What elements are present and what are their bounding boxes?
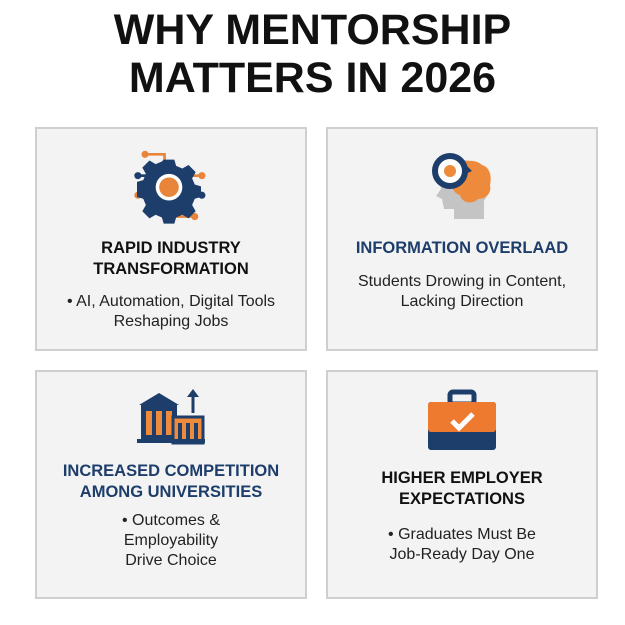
text [122,512,220,569]
text: Students Drowing in Content, [358,273,566,290]
heading [381,469,543,508]
text: Employability [124,532,218,549]
text [388,526,536,563]
heading: EXPECTATIONS [399,490,525,508]
text: Reshaping Jobs [114,313,228,330]
panel: rapid industry transformation [35,127,307,351]
title [114,6,511,102]
text: • Graduates Must Be [388,526,536,543]
heading: INCREASED COMPETITION [63,462,279,480]
icon: buildings [137,389,205,444]
heading: RAPID INDUSTRY [101,239,241,257]
heading: INFORMATION OVERLAAD [356,239,568,257]
text: Drive Choice [125,552,217,569]
panel: information overload [326,127,598,351]
title: WHY MENTORSHIP [114,6,511,54]
text: • AI, Automation, Digital Tools [67,293,275,310]
icon: head with brain [432,153,491,219]
icon: briefcase [428,390,496,450]
text: Job-Ready Day One [390,546,534,563]
icon: gear [134,150,206,224]
text [358,273,566,310]
panel: increased competition [35,370,307,599]
heading: TRANSFORMATION [93,260,249,278]
heading [63,462,279,501]
text [67,293,275,330]
text: Lacking Direction [401,293,523,310]
heading: HIGHER EMPLOYER [381,469,543,487]
text: • Outcomes & [122,512,220,529]
panel: higher employer expectations [326,370,598,599]
title: MATTERS IN 2026 [129,54,496,102]
heading [93,239,249,278]
heading: AMONG UNIVERSITIES [80,483,262,501]
